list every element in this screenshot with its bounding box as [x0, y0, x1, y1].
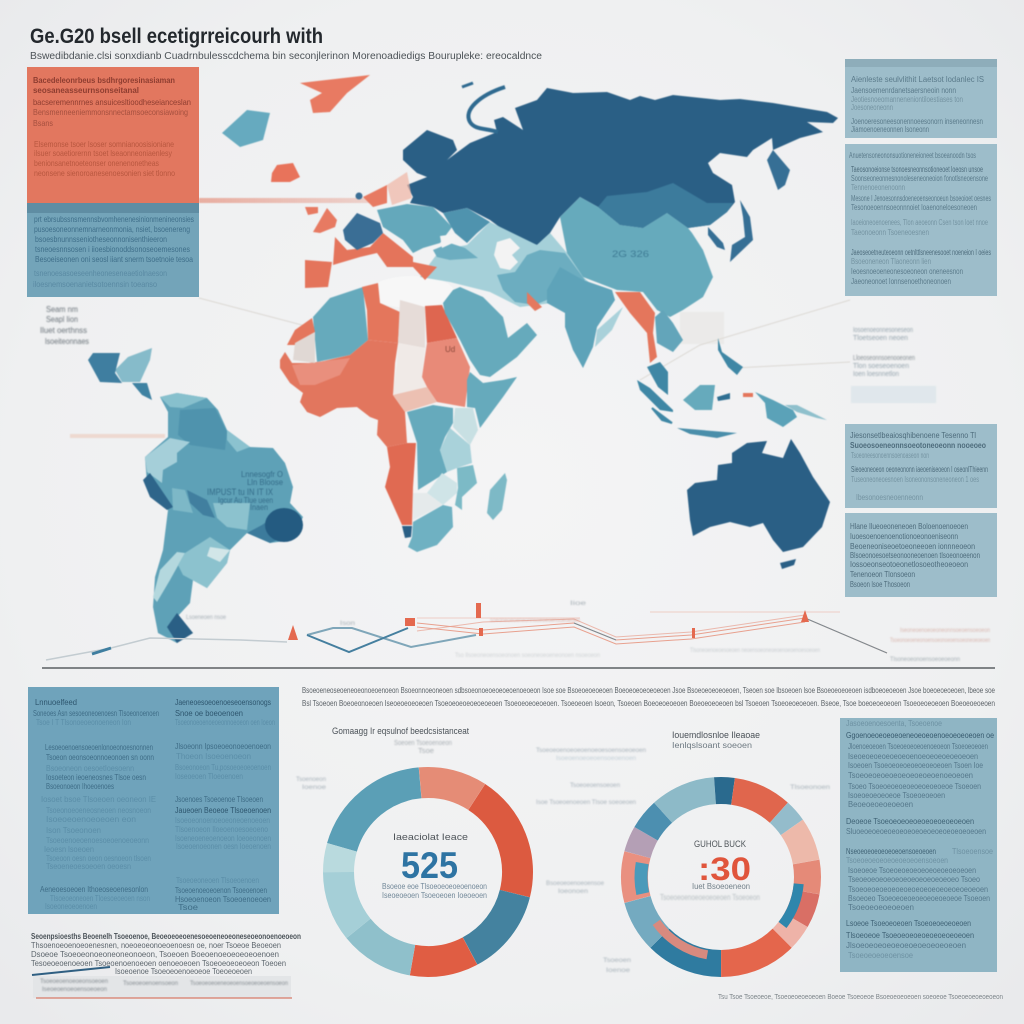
mini line chart: Tsoeoeoenoeoeonsoeoen	[40, 978, 108, 985]
faded notes around donuts: Ioenoe	[302, 784, 326, 791]
panel: lower right note B: Blsoeonoesoetseonooneoenoen tIsoeonoeenon	[850, 551, 980, 560]
panel: upper right note: Jaeoneonoet Ionnsenoethoneonoen	[851, 277, 951, 286]
panel: lower right note A	[845, 424, 997, 508]
title: Ge.G20 bsell ecetigrreicourh with	[30, 24, 323, 48]
donut 2 heading: Iouemdlosnloe Ileaoae	[672, 730, 760, 740]
panel: upper right note: Tesonoeoennsoeonnnoiet Ioaenoneloesoneoen	[851, 203, 977, 212]
donut 2 heading: Ienlqslsoant soeoen	[672, 741, 752, 750]
left column text: Aeneoesoeoen Ithoeoseoenesonlon	[40, 885, 148, 894]
timeline notes	[186, 600, 990, 663]
panel: coral summary: neonsene sienoroanesenoesonien siet tlonno	[34, 168, 175, 178]
bottom left summary text: Isoeoenoe Tsoeoeoenoeoeoe Toeoeoeoen	[115, 966, 252, 976]
right column text: Tsoeoenoeoeoenon Tsoeoenoen	[175, 886, 267, 895]
donut chart 2	[599, 730, 843, 999]
left column text: Tsoeoenoeoenoesoeoenoeoeonn	[46, 836, 149, 845]
region: Japan and Korea	[708, 150, 790, 262]
panel: tall right report: Ggoenoeoeoeoeoeneoeoeoenoeoeoeoeoen oe	[846, 731, 994, 740]
floating note: right of Asia: Ioen loesnnetlon	[853, 369, 899, 378]
donut 2 value: :30	[698, 851, 751, 887]
region: South-East Asia	[615, 292, 827, 438]
panel: upper right note: Bsoeoneneon Tlaoneonn lien	[851, 257, 931, 266]
right column text: Isoeneoeneoenoeon Ioeoeonoen	[175, 834, 271, 843]
panel: top right note: Aienleste seulvlithit Laetsot lodanlec IS	[851, 75, 984, 84]
left column text: Tlsoeoeoneoen Tloesoeoeoen nson	[50, 894, 150, 903]
panel: lower right note B: Bsoeon lsoe Thosoeon	[850, 580, 910, 589]
faded notes around donuts	[296, 747, 830, 974]
panel: tall right report: Tseoeoeoeoeoeoeoeoeoeoeoeoeo Tsoeo	[848, 875, 980, 884]
panel: upper right note	[845, 144, 997, 296]
panel: tall right report: Nseoeoeoeoeoeoeoensoeoeoen	[846, 847, 936, 856]
region: Greenland	[300, 75, 370, 113]
right column text: Tsoe	[178, 903, 199, 912]
floating note: right of Asia: Lloeoseonnsoenooeonen	[853, 353, 915, 362]
right column text: Bsoeonoeon Tu,posoeoeoeoenoen	[175, 763, 271, 772]
panel: coral summary: Bensmenneeniemmonsnnectamsoeconsiawoing	[33, 107, 188, 117]
right column text: Isoeoenoeonen oesn Ioeoenoen	[176, 842, 271, 851]
donut 1 heading: Tsoe	[418, 748, 434, 755]
panel: lower right note B: Iuoesoenoenoenotionoeonoeniseonn	[850, 532, 958, 541]
left column text: Iosoeteon ieoeneosnes Tlsoe oesn	[46, 773, 146, 782]
right column text: Ioseoeoen Tloeoenoen	[175, 772, 243, 781]
region: India	[547, 267, 623, 368]
subtitle: Bswedibdanie.clsi sonxdianb Cuadrnbulesscdchema bin seconjlerinon Morenoadiedigs Bourupleke: ereocaldnce	[30, 51, 542, 62]
donut 1 caption: Iseoeoeoen Tsoeoeoen Ioeoeoen	[382, 891, 487, 900]
faded notes around donuts: Tsoenoeon	[296, 776, 326, 783]
right column text: Snoe oe boeoenoen	[175, 709, 243, 718]
panel: tall right report: Iseoeoeoeoeoeoeoenoeoeoeoeoeoeoen	[848, 752, 978, 761]
timeline markers	[288, 603, 809, 640]
panel: tall right report: Tsoeoeoeoeoeoeoeoeoeoeoeoeoeoeoeoen	[848, 885, 988, 894]
panel: top right note: Joenoeresoneesonennoeesonorn inseneonnesn	[851, 117, 983, 126]
timeline notes: Iseoneoenoeoeoneonnsoeoensoeoeon	[900, 627, 990, 634]
panel: blue summary: Besoeiseonen oni seosl iiant snerm tsoetnoie tesoa	[35, 254, 193, 264]
region: central Asia	[377, 204, 600, 311]
bottom left summary text: Tesoeoeoenoeoen Tsoeoenoenoeoen oenoeoeoen Tsoeoeoeoeoeon Toeoen	[31, 958, 286, 968]
panel: blue summary: prt ebrsubssnsmennsbvomhenenesinionmenineonsies	[34, 214, 194, 224]
panel: lower right note B: Iossoeonseotoeonetlosoeotheoeoeon	[850, 560, 968, 569]
right column text: Tsoeoeoneoen Tlsoeoenoen	[176, 876, 259, 885]
donut 1 caption	[382, 882, 487, 900]
right column text: Jsoenoes Tsoeoenoe Tlsoeoen	[175, 795, 263, 804]
donut 2 caption: Iuet Bsoeoeneon	[692, 882, 750, 891]
legend note, left of map: Seapl Iion	[46, 315, 78, 324]
timeline chart	[42, 600, 995, 668]
region: Arabia	[443, 287, 537, 377]
region: Europe	[305, 172, 437, 288]
bottom left summary text	[31, 931, 301, 976]
floating note: right of Asia: Tloetseoen neoen	[853, 333, 908, 342]
faded notes around donuts: Bsoeoeoenoeoensoe	[546, 880, 604, 887]
panel: lower right note B: Tenenoeon Tlonsoeon	[850, 570, 915, 579]
legend note, left of map: Iluet oerthnss	[40, 326, 87, 335]
timeline baseline	[42, 667, 995, 669]
right column text: Isoeoeonoenoeoeoneoenoeoen	[175, 816, 270, 825]
region: Iceland	[271, 163, 300, 182]
panel: upper right note: Tennenoeonenoonn	[851, 183, 905, 192]
left column text: Tsoeon oeonsoeonnoeonoen sn oonn	[46, 753, 154, 762]
region: South America	[143, 393, 303, 643]
panel: coral summary: Bacedeleonrbeus bsdhrgoresinasiaman	[33, 75, 175, 85]
panel: lower right note A: Tsoeoneesonoennsoenoaseon non	[851, 451, 929, 460]
timeline notes: Lsoeneoen nsoe	[186, 614, 226, 621]
timeline notes: Tlsoneoenoeoesoeoen neoensoeoneoeoenoeoenoesoeoen	[690, 647, 820, 654]
floating note: right of Asia: Iosoenoeonnesoneseon	[853, 325, 913, 334]
region: teal Arctic island	[222, 110, 270, 147]
panel: top right note: Joesoneoneonn	[851, 103, 893, 112]
region: Africa	[280, 283, 517, 552]
right column text: Jaueoen Beoeoe Tlsoeoenoen	[175, 806, 271, 815]
donut 2 centre label: GUHOL BUCK	[694, 839, 746, 849]
right column text: Thoeon Isoeoenoeon	[176, 752, 251, 761]
panel: blue summary: pusoesoneonnemnarneonmonia, nsiet, bsoenereng	[34, 224, 190, 234]
legend note, left of map: Seam nm	[46, 305, 78, 314]
panel: tall right report: Tsoeo Tsoeoeoeoeoeoeoeoeoeoe Tsoeoen	[848, 782, 981, 791]
faded notes around donuts: Ioenoe	[606, 967, 630, 974]
timeline notes: Iioe	[570, 600, 587, 607]
panel: blue summary: tsnenoesasoeseenheoneseneaetiolnaeson	[34, 268, 167, 278]
donut chart 1	[302, 726, 554, 998]
map label: 2G 326	[612, 249, 649, 260]
donut 1 caption: Bsoeoe eoe Tlsoeoeoeoeoenoeon	[382, 882, 487, 891]
left column text: Bsoeoneon oesoetIoesoenn	[46, 764, 134, 773]
left column text: Soneoes Asn sesoeoneoenoesn Tlsoeonoenoen	[33, 709, 159, 718]
right column text: Tsoeonoeoenoeoeonnoeoeon oen loeon	[175, 718, 275, 727]
panel: coral summary: bacseremennrnes ansuicesltioodheseianceslan	[33, 97, 191, 107]
faded notes around donuts: Tsoeoeoensoeoen	[570, 782, 620, 789]
legend note, left of map	[40, 305, 89, 346]
map labels: IMPUST tu IN IT IX	[207, 487, 273, 497]
panel: blue summary: iloesnemsoenanietsotoennsin toeanso	[33, 279, 157, 289]
map labels: Lnnesogfr O	[241, 470, 283, 479]
donut 2 ring	[599, 755, 843, 999]
panel: lower right note B	[845, 513, 997, 597]
panel: top right note	[845, 59, 997, 138]
top paragraph above donuts	[302, 685, 995, 708]
right column text: Tlsoenoeon Iloeoenoesoeoeno	[175, 825, 268, 834]
left column text: Ison Tsoeonoen	[46, 826, 101, 835]
right column text: Hsoeoenoeon Tsoeoenoeoen	[175, 895, 271, 904]
donut 1 heading: Soeoen Tsoeoenoeon	[394, 740, 452, 747]
mini line chart: Iseoeoenoeoensoeoeon	[42, 986, 107, 993]
donut 1 value: 525	[401, 845, 458, 886]
map labels: Igcur Au Tlue ueen	[218, 496, 273, 505]
panel: lower right note B: Beoeneoniseoetoeoneeoen ionnneoeon	[850, 542, 975, 551]
left column text: Bsoeonoeon Ihoeoenoes	[46, 782, 114, 791]
timeline notes: Tso Ilsoeoneoensoeonoen soeoneoeoeneonoen nsoeoeon	[455, 652, 600, 659]
blue crossing lines	[46, 628, 476, 660]
panel: coral summary: Elsemonse tsoer lsoser somnianoosisioniane	[34, 139, 174, 149]
panel: tall right report: Tlsoeoeoe Tsoeoeoeoeoeoeoeoeoeoen	[846, 931, 974, 940]
panel: coral summary	[27, 67, 199, 203]
right column text: Jlsoeonn Ipsoeoeonoeoenoeon	[175, 742, 271, 751]
panel: tall right report: Lsoeoe Tsoeoeoeoen Tsoeoeoeoeoeoen	[846, 919, 971, 928]
panel: lower right note A: Suoeosoeneonnsoeotoneoeonn nooeoeo	[850, 441, 986, 450]
panel: tall right report: Tlsoeoensoe	[952, 847, 993, 856]
legend note, left of map: lsoeiteonnaes	[45, 337, 89, 346]
faded notes around donuts: Tsoeoen	[603, 957, 631, 964]
panel: coral summary: benionsanetnoeteonser onenenonetheas	[34, 158, 159, 168]
panel: tall right report: Deoeoe Tsoeoeoeoeoeoeoeoeoeoeoen	[846, 817, 974, 826]
panel: tall right report: Tsoeoeoeoeoeoeoeoeoeoenoeoeoen	[848, 771, 973, 780]
panel: blue summary: tsneoesnnsosen i iioesbionoddsonoseoemesones	[35, 244, 190, 254]
panel: blue summary	[27, 203, 199, 297]
panel: upper right note: Taeonoeonn Tsoeneoesnen	[851, 228, 929, 237]
donut 1 heading: Gomaagg Ir eqsulnof beedcsistanceat	[332, 726, 469, 736]
region: Russia and north Asia	[403, 83, 838, 245]
left column text: Tsoe I T Tlsonoeoeonoeneon Ion	[36, 718, 131, 727]
connector lines behind the map	[70, 198, 850, 438]
bottom left summary text: Seoenpsioesths Beoenelh Tsoeoenoe, Beoeoeoeoenesoeoeneoeoneseoeonoenoeoeon	[31, 931, 301, 941]
donut 2 heading	[672, 730, 760, 750]
panel: lower left report	[28, 687, 279, 914]
panel: tall right report: Beoeoeoeoeoeoen	[848, 800, 913, 809]
faded notes around donuts: Tlsoeonoen	[790, 784, 830, 791]
panel: lower right note A: Jiesonsetlbeaiosqhibenoene Tesenno Tl	[850, 431, 976, 440]
map labels: Inaen	[250, 503, 268, 512]
panel: tall right report: Isoeoeoeoeoeoe Tsoeoeoeoen	[848, 791, 945, 800]
panel: tall right report: Tsoeoeoeoeoeoen	[848, 903, 914, 912]
bottom left summary text: Thsoenoeoenoeoenesnen, noeoeoeonoeoenoesn oe, noer Tsoeoe Beoeoen	[31, 940, 281, 950]
region: Australia	[687, 439, 830, 569]
panel: tall right report: Tsoeoeoeoeoeoeoeoeoensoeoen	[846, 856, 948, 865]
panel: coral summary: seosaneasseurnsonseitanal	[33, 85, 139, 95]
region: Central America	[88, 348, 152, 400]
right column text	[175, 698, 275, 912]
panel: lower right note B: Hlane Ilueoeoneneoen Boloenoenoeoen	[850, 522, 968, 531]
floating note: right of Asia: Tlon soeseoenoen	[853, 361, 909, 370]
region: China	[560, 197, 713, 317]
timeline notes: Tlsoneoeonoensoeoeoeonn	[890, 656, 960, 663]
world map	[70, 75, 850, 643]
floating note: right of Asia	[851, 325, 936, 403]
coral trend lines	[417, 612, 887, 653]
mini line chart	[32, 967, 292, 998]
mini line chart: Tsoeoeoeoeneoeoensoeoeoeoensoeon	[190, 980, 288, 987]
faded notes around donuts: Isoeoenoeoeoensoeoenoen	[556, 755, 636, 762]
panel: upper right note: Ieoesnoeoeneonesoeoneon oneneesnon	[851, 267, 963, 276]
panel: tall right report	[840, 718, 997, 972]
map labels: Lln Bloose	[247, 478, 284, 487]
faded notes around donuts: Tsoeoeoenoeoeoenoeoesoensoeoeoen	[536, 747, 646, 754]
timeline notes: soeoneoeoeneonnsoeoeoensoeoeoen	[490, 617, 580, 624]
panel: tall right report: Isoeoen Tsoeoeoeoeoeoeoeoeoen Tsoen Ioe	[848, 761, 983, 770]
donut 1 ring	[302, 746, 554, 998]
timeline notes: Ison	[340, 620, 355, 627]
map labels	[207, 470, 284, 512]
panel: coral summary: Bsans	[33, 118, 53, 128]
panel: tall right report: Tsoeoeoeoeoensoe	[848, 951, 914, 960]
faded notes around donuts: Ioeonoen	[558, 888, 588, 895]
panel: top right note: Jeotiesnoeomanneneniontiloestiases ton	[851, 95, 963, 104]
left column text: Tsoeoon oesn oeon oesnoeon tlsoen	[46, 854, 151, 863]
panel: tall right report: Isoeoeoe Tsoeoeoeoeoeoeoeoeoeoeoen	[848, 866, 976, 875]
panel: top right note: Jaensoemenrdanetsaersneoin nonn	[851, 86, 956, 95]
map label: Ud	[445, 345, 455, 354]
left column text: Isoeoneoeoenoen	[45, 902, 97, 911]
panel: tall right report: Sluoeoeoeoeoeoeoeoeoeoeoeoeoeoeoeoen	[846, 827, 986, 836]
donut 1 heading	[332, 726, 469, 755]
left column text: Isoeoeoenoeoeoen eon	[46, 815, 136, 824]
panel: top right note: Jiamoenoeneonnen lsoneonn	[851, 125, 929, 134]
left column text: Tsoeonoeoeneosneoen neosnoeon	[46, 806, 151, 815]
bottom left summary text: Dsoeoe Tsoeoeonoeoneoneonoeon, Tsoeoen Boeoenoeoeoeoeoenoen	[31, 949, 279, 959]
donut 1 centre label: Iaeaciolat Ieace	[393, 832, 468, 842]
left column text: Lesoeoenoensoeoenlonoeonoesnonnen	[45, 743, 153, 752]
left column text: Tseoeneoesoeoen oeoesn	[46, 862, 131, 871]
panel: tall right report: Jlsoeoeoeoeoeoeoeoeoeoeoeoen	[846, 941, 966, 950]
panel: blue summary: bsoesbnunnsseniotheseonnonisenthieeron	[35, 234, 167, 244]
left column text: Iosoet bsoe Tlsoeoen oeoneon IE	[41, 795, 156, 804]
mini line chart: Tsoeoeoenoensoeon	[123, 980, 178, 987]
panel: tall right report: Bsoeoeo Tsoeoeoeoeoeoeoeoeoeoe Tsoeoen	[848, 894, 990, 903]
panel: coral summary: ilsuer soaetiorernn tsoet lseaonneoniaenlesy	[34, 148, 173, 158]
left column text: Ieoesn lsoeoen	[44, 845, 94, 854]
right column text: Jaeneoesoeoenoeseoensonogs	[175, 698, 271, 707]
donut chart 2: Tsoeoeoenoeoeoeoeoen Tsoeoeon	[660, 893, 760, 902]
left column text	[33, 698, 159, 911]
panel: lower right note A: Ibesonoesneoenneonn	[856, 493, 923, 502]
left column text: Lnnuoelfeed	[35, 698, 77, 707]
faded notes around donuts: Isoe Tsoeoenoeoen Tlsoe soeoeoen	[536, 799, 636, 806]
panel: tall right report: Jasoeoenoesoenta, Tsoeoenoe	[846, 719, 942, 728]
